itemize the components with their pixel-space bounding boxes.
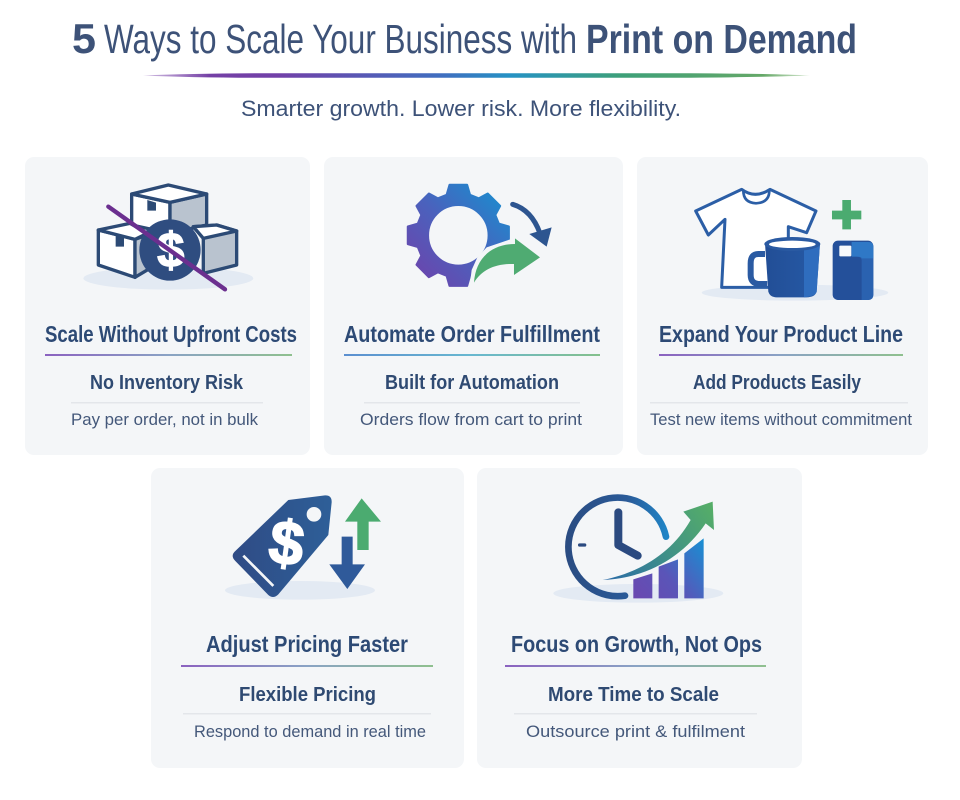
heading: Scale Without Upfront Costs xyxy=(45,321,297,347)
icon: t-shirt, mug, phone case and plus xyxy=(696,189,888,301)
heading: Adjust Pricing Faster xyxy=(206,631,408,657)
benefit: More Time to Scale xyxy=(548,683,719,706)
icon: price tag with up and down arrows: $ xyxy=(265,507,308,580)
icon: price tag with up and down arrows xyxy=(225,495,381,600)
benefit: Built for Automation xyxy=(385,371,559,394)
icon: boxes with crossed-out dollar xyxy=(83,185,253,290)
icon: gear with arrows xyxy=(408,185,552,289)
description: Respond to demand in real time xyxy=(194,722,426,741)
panel: scale without upfront costs xyxy=(25,157,310,455)
panel: adjust pricing faster xyxy=(151,468,464,768)
benefit: No Inventory Risk xyxy=(90,371,244,394)
heading: Focus on Growth, Not Ops xyxy=(511,631,762,657)
panel: focus on growth, not ops xyxy=(477,468,802,768)
description: Outsource print & fulfilment xyxy=(526,722,745,741)
title: 5 xyxy=(72,15,96,62)
icon: clock with growth chart xyxy=(553,498,723,603)
icon: boxes with crossed-out dollar: $ xyxy=(157,224,184,278)
benefit: Add Products Easily xyxy=(693,371,862,394)
title: Ways to Scale Your Business with xyxy=(104,16,577,62)
panel: expand your product line xyxy=(637,157,928,455)
title gradient rule xyxy=(143,73,810,78)
title: Print on Demand xyxy=(586,16,857,62)
description: Test new items without commitment xyxy=(650,410,912,429)
description: Pay per order, not in bulk xyxy=(71,410,258,429)
description: Orders flow from cart to print xyxy=(360,410,582,429)
panel: automate order fulfillment xyxy=(324,157,623,455)
heading: Automate Order Fulfillment xyxy=(344,321,600,347)
benefit: Flexible Pricing xyxy=(239,683,376,706)
subtitle: Smarter growth. Lower risk. More flexibility. xyxy=(241,96,681,121)
heading: Expand Your Product Line xyxy=(659,321,903,347)
